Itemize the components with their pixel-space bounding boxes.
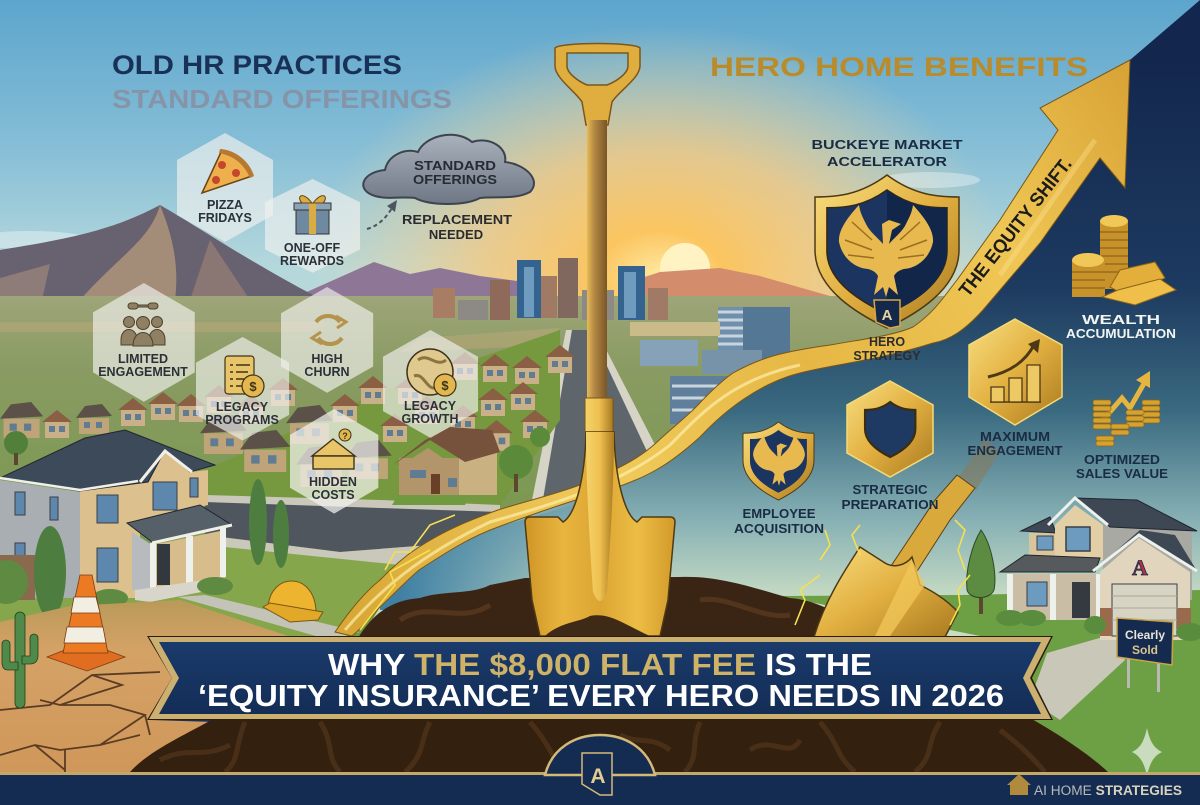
footer logo text: AI HOME STRATEGIES — [1034, 783, 1182, 798]
replacement needed note: NEEDED — [429, 227, 483, 242]
icon: house with question: ? — [342, 431, 348, 441]
subtitle: standard offerings: STANDARD OFFERINGS — [112, 84, 452, 114]
hexagon: limited engagement: ENGAGEMENT — [98, 365, 188, 379]
hexagon: pizza fridays: FRIDAYS — [198, 211, 252, 225]
icon: shield — [865, 402, 915, 457]
hexagon: maximum engagement: ENGAGEMENT — [968, 443, 1063, 458]
hexagon: hidden costs: HIDDEN — [309, 475, 357, 489]
fields — [0, 322, 560, 352]
digging shovel — [814, 438, 1000, 637]
hexagon: one-off rewards — [265, 179, 360, 273]
blue tint below ribbon — [380, 497, 600, 610]
label: optimized sales value: SALES VALUE — [1076, 466, 1168, 481]
hard hat — [263, 581, 323, 622]
shovel shaft — [587, 120, 607, 402]
driveway — [1030, 633, 1125, 720]
mountain — [0, 205, 320, 305]
sun — [660, 243, 710, 293]
hexagon: one-off rewards: ONE-OFF — [284, 241, 340, 255]
headline line 2: ‘EQUITY INSURANCE’ EVERY HERO NEEDS IN 2026 — [198, 678, 1004, 713]
distant purple mountains — [300, 262, 830, 305]
icon: coins and gold bars — [1072, 215, 1176, 305]
label: buckeye market accelerator — [812, 137, 963, 169]
shovel grip — [555, 44, 640, 125]
hexagon: legacy growth: LEGACY — [404, 399, 457, 413]
hexagon: legacy growth — [383, 330, 478, 438]
hexagon: limited engagement — [93, 283, 195, 402]
equity shift arrow — [335, 60, 1130, 636]
hexagon: high churn — [281, 287, 373, 393]
icon: gift — [294, 196, 331, 234]
badge: arizona: A — [882, 307, 893, 324]
dirt in front of blade — [545, 615, 650, 636]
left lawn — [0, 545, 400, 640]
icon: checklist and coin: $ — [249, 379, 257, 394]
sunset glow — [310, 25, 1010, 525]
arrow label: THE EQUITY SHIFT. — [955, 154, 1077, 301]
main golden shovel — [525, 44, 675, 636]
hexagon: maximum engagement: MAXIMUM — [980, 429, 1050, 444]
hexagon: pizza fridays — [177, 133, 273, 242]
label: hero strategy: HERO — [869, 335, 905, 349]
banner — [147, 636, 1053, 720]
varsity letter A: A — [1132, 555, 1148, 580]
hero shield — [815, 175, 959, 328]
central road — [530, 330, 668, 510]
footer emblem: A — [590, 765, 606, 788]
label: wealth accumulation: WEALTH — [1082, 312, 1160, 327]
label: hero strategy: STRATEGY — [853, 349, 921, 363]
right bushes — [996, 610, 1200, 641]
hexagon: maximum engagement — [968, 319, 1063, 458]
label: buckeye market accelerator: BUCKEYE MARKET — [812, 137, 963, 152]
skyline — [433, 258, 668, 320]
label: buckeye market accelerator: ACCELERATOR — [827, 154, 948, 169]
footer logo text — [1007, 774, 1182, 798]
footer bar — [0, 735, 1200, 805]
shield: employee acquisition — [734, 422, 824, 536]
title: old HR practices: OLD HR PRACTICES — [112, 50, 402, 80]
icon: pizza — [202, 149, 254, 193]
offices — [630, 307, 790, 424]
land — [0, 296, 960, 640]
dirt mound — [130, 577, 1108, 772]
label: optimized sales value — [1076, 452, 1168, 481]
replacement needed note: REPLACEMENT — [402, 212, 512, 227]
hexagon: strategic preparation: PREPARATION — [842, 497, 938, 512]
label: optimized sales value: OPTIMIZED — [1084, 452, 1160, 467]
cracked desert ground — [0, 600, 300, 772]
hexagon: pizza fridays: PIZZA — [207, 198, 243, 212]
shovel collar — [585, 398, 613, 432]
icon: globe and coin: $ — [441, 378, 449, 393]
shield: employee acquisition: EMPLOYEE — [742, 506, 816, 521]
traffic cone — [47, 575, 125, 671]
badge: arizona — [874, 300, 900, 328]
hexagon: high churn: CHURN — [304, 365, 350, 379]
replacement needed note — [402, 212, 512, 242]
hexagon: one-off rewards: REWARDS — [280, 254, 344, 268]
cypress trees and bushes — [0, 479, 289, 618]
label: wealth accumulation: ACCUMULATION — [1066, 326, 1176, 341]
hexagon: strategic preparation — [842, 381, 938, 512]
sign: clearly sold — [1117, 618, 1173, 692]
hexagon: hidden costs — [290, 409, 378, 514]
hexagon: legacy programs — [196, 337, 289, 441]
cactus — [2, 612, 38, 708]
shovel ridge — [586, 432, 614, 601]
hexagon: hidden costs: COSTS — [311, 488, 355, 502]
right house — [1000, 498, 1197, 640]
shovel blade — [525, 432, 675, 636]
lightning sparks — [360, 515, 970, 630]
hexagon: legacy growth: GROWTH — [402, 412, 458, 426]
big left house — [0, 430, 232, 602]
sparkle — [1132, 728, 1162, 776]
title: hero home benefits: HERO HOME BENEFITS — [710, 52, 1088, 82]
cloud: standard offerings: OFFERINGS — [413, 172, 497, 187]
hexagon: strategic preparation: STRATEGIC — [852, 482, 928, 497]
label: hero strategy — [853, 335, 921, 363]
street — [205, 495, 500, 567]
wispy clouds — [0, 172, 980, 249]
hexagon: legacy programs: LEGACY — [216, 400, 269, 414]
right tree — [967, 530, 995, 614]
icon: optimized sales coins — [1093, 371, 1160, 446]
hexagon: legacy programs: PROGRAMS — [205, 413, 279, 427]
foreground neighbourhood house — [392, 427, 500, 505]
sign: clearly sold: Clearly — [1125, 628, 1165, 642]
footer emblem — [545, 735, 655, 795]
hexagon: limited engagement: LIMITED — [118, 352, 168, 366]
sign: clearly sold: Sold — [1132, 643, 1158, 657]
icon: churn arrows — [312, 316, 346, 344]
label: wealth accumulation — [1066, 312, 1176, 341]
icon: rising bars — [988, 339, 1041, 402]
neighbourhood yard — [205, 330, 560, 505]
background sky — [0, 0, 1200, 640]
sidewalk — [178, 595, 360, 640]
trees — [4, 427, 550, 492]
headline line 1: WHY THE $8,000 FLAT FEE IS THE — [328, 647, 872, 682]
right lawn — [780, 590, 1200, 775]
cloud: standard offerings: STANDARD — [414, 158, 496, 173]
cloud: standard offerings — [363, 135, 534, 204]
dashed arrow — [367, 200, 397, 229]
icon: people — [121, 303, 165, 346]
shield: employee acquisition: ACQUISITION — [734, 521, 824, 536]
hexagon: high churn: HIGH — [311, 352, 343, 366]
night panel — [360, 0, 1200, 640]
suburban houses — [0, 345, 575, 487]
